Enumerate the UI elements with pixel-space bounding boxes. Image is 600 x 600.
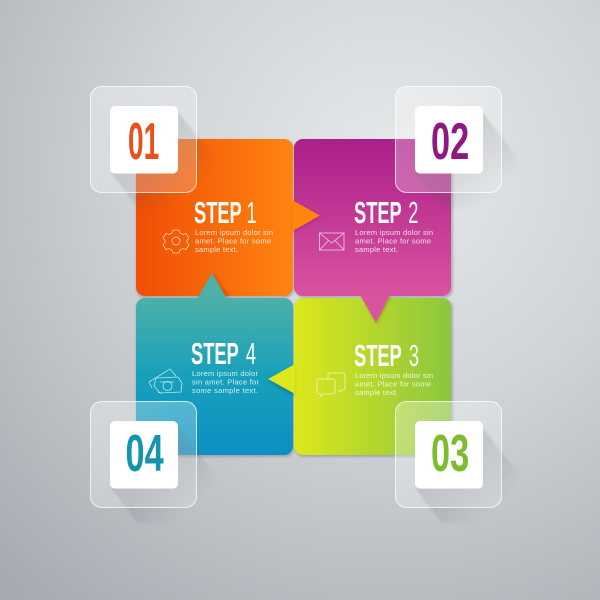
step 1 heading: STEP 1: [194, 196, 257, 230]
step 2 heading: STEP 2: [354, 196, 418, 230]
card shadows: [136, 140, 453, 457]
step 4 heading: STEP 4: [191, 337, 256, 371]
glass panel: [90, 86, 196, 192]
white tile: [415, 421, 483, 488]
badge 03: [396, 402, 518, 523]
step 4 text: some sample text.: [192, 386, 258, 395]
step 2 text: sample text.: [355, 245, 398, 254]
white tile: [110, 106, 178, 174]
step 4 text: Lorem ipsum dolor: [192, 369, 258, 378]
step 4 text: sin amet. Place for: [192, 378, 260, 386]
glass panel: [396, 402, 502, 508]
step 1 text: Lorem ipsum dolor sin: [195, 228, 273, 237]
step 3 text: Lorem ipsum dolor sin: [355, 371, 433, 380]
step 3 heading: STEP 3: [354, 339, 419, 373]
icon: envelope: [320, 233, 344, 250]
icon: speech bubbles: [317, 373, 345, 396]
step 3 text: sample text.: [355, 388, 398, 397]
white tile: [415, 106, 483, 174]
arrow: green to teal: [268, 364, 295, 396]
step 2 text: Lorem ipsum dolor sin: [355, 228, 433, 237]
step 1 text: amet. Place for some: [195, 236, 271, 246]
arrow: orange to purple: [292, 200, 321, 232]
arrow: purple to green: [360, 295, 392, 324]
icon: gear: [163, 230, 189, 253]
glass panel: [396, 86, 502, 192]
panel: step 3 green card: [294, 298, 451, 455]
glass panel: [90, 402, 196, 508]
white tile: [110, 421, 178, 488]
badge 01: [90, 86, 214, 208]
panel: step 2 purple card: [294, 139, 451, 296]
number: 03: [431, 425, 469, 483]
step 3 text: amet. Place for some: [355, 380, 431, 388]
icon: banknotes: [149, 369, 182, 393]
badge 02: [396, 86, 518, 208]
step 2 text: amet. Place for some: [355, 236, 431, 246]
number: 02: [431, 113, 469, 171]
step 1 text: sample text.: [195, 245, 238, 254]
panel: step 1 orange card: [136, 139, 293, 296]
number: 04: [126, 425, 164, 483]
arrow: teal to orange: [197, 273, 230, 299]
badge 04: [90, 402, 214, 523]
number: 01: [128, 112, 159, 170]
panel: step 4 teal card: [136, 298, 293, 455]
